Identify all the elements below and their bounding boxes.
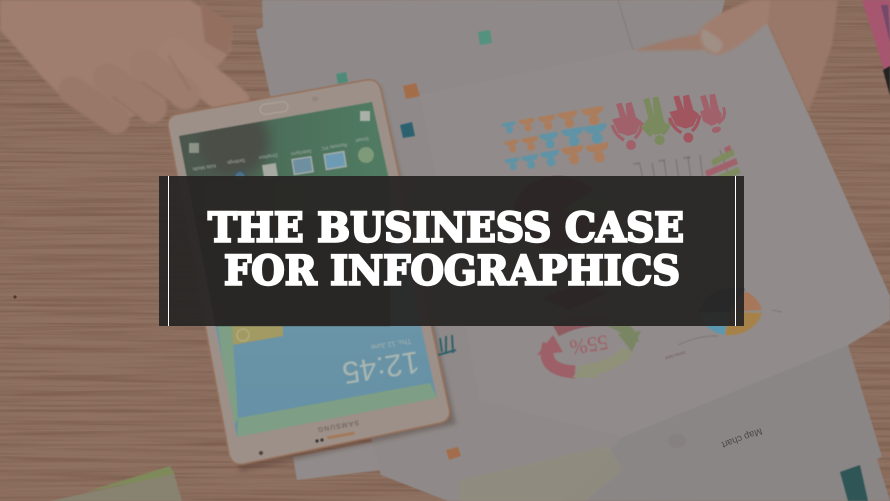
app labels: Settings — [226, 157, 246, 165]
remote app icon — [324, 152, 346, 169]
globe app icon — [358, 147, 374, 163]
white app icon — [262, 163, 278, 179]
upper green tag — [478, 30, 492, 45]
app labels: SideSync — [290, 147, 312, 157]
sticky notes bottom left — [50, 466, 182, 501]
app labels — [192, 135, 369, 172]
orange tag — [403, 83, 420, 99]
title — [208, 204, 684, 294]
tablet shadow — [178, 86, 456, 472]
pie legend label: Series label — [665, 350, 686, 361]
lower sensors — [259, 438, 324, 455]
home button — [259, 101, 289, 115]
lower orange tag — [446, 447, 461, 460]
donut percentage: 55% — [568, 330, 610, 360]
title: THE BUSINESS CASE — [208, 204, 684, 252]
bar chart on paper: Item — [683, 155, 691, 160]
green person — [642, 97, 670, 145]
donut progress chart — [537, 320, 641, 378]
banner background — [159, 176, 744, 326]
pink person — [612, 102, 642, 150]
map chart caption: Map chart — [720, 425, 764, 450]
right hand holding the paper — [636, 0, 838, 112]
red person — [669, 95, 700, 143]
map chart faint figure — [668, 434, 686, 448]
app grid icon — [189, 143, 199, 153]
banner left rule — [168, 176, 169, 326]
banner right rule — [735, 176, 736, 326]
blue tag — [400, 122, 415, 138]
app labels: Kids Mode — [192, 162, 216, 172]
left hand pressing the tablet — [0, 0, 250, 125]
bar chart on paper: Item — [633, 161, 641, 166]
app labels: Remote PC — [321, 141, 347, 151]
teal tag — [336, 72, 348, 84]
speaker grille — [327, 432, 355, 439]
tablet body — [168, 80, 450, 464]
bar chart on paper: Item — [658, 158, 666, 163]
small people pictogram grid — [502, 106, 612, 171]
clock date: Thu, 12 June — [370, 337, 412, 350]
app labels: Smart — [355, 135, 369, 143]
sun widget — [237, 329, 249, 341]
clock time: 12:45 — [340, 344, 422, 391]
marker pen — [862, 0, 890, 96]
pie chart large — [513, 176, 618, 310]
title banner — [159, 176, 744, 326]
bar chart on paper — [633, 145, 741, 181]
tablet screen — [170, 95, 437, 437]
app labels: Dropbox — [258, 152, 278, 161]
photo app icon — [292, 157, 313, 174]
gear app icon — [234, 171, 246, 183]
front camera — [311, 96, 319, 102]
status square — [360, 111, 370, 121]
pale yellow note — [460, 446, 622, 501]
pie chart small — [665, 287, 782, 361]
title: FOR INFOGRAPHICS — [224, 246, 680, 294]
large people pictograms — [612, 94, 725, 150]
blue-green cluster — [438, 335, 456, 355]
paper sheets — [256, 0, 890, 501]
teal corner bar — [840, 465, 868, 501]
pink short person — [700, 94, 725, 134]
samsung wordmark: SAMSUNG — [316, 418, 359, 433]
tablet — [168, 80, 456, 472]
paper tag icons — [336, 30, 492, 460]
